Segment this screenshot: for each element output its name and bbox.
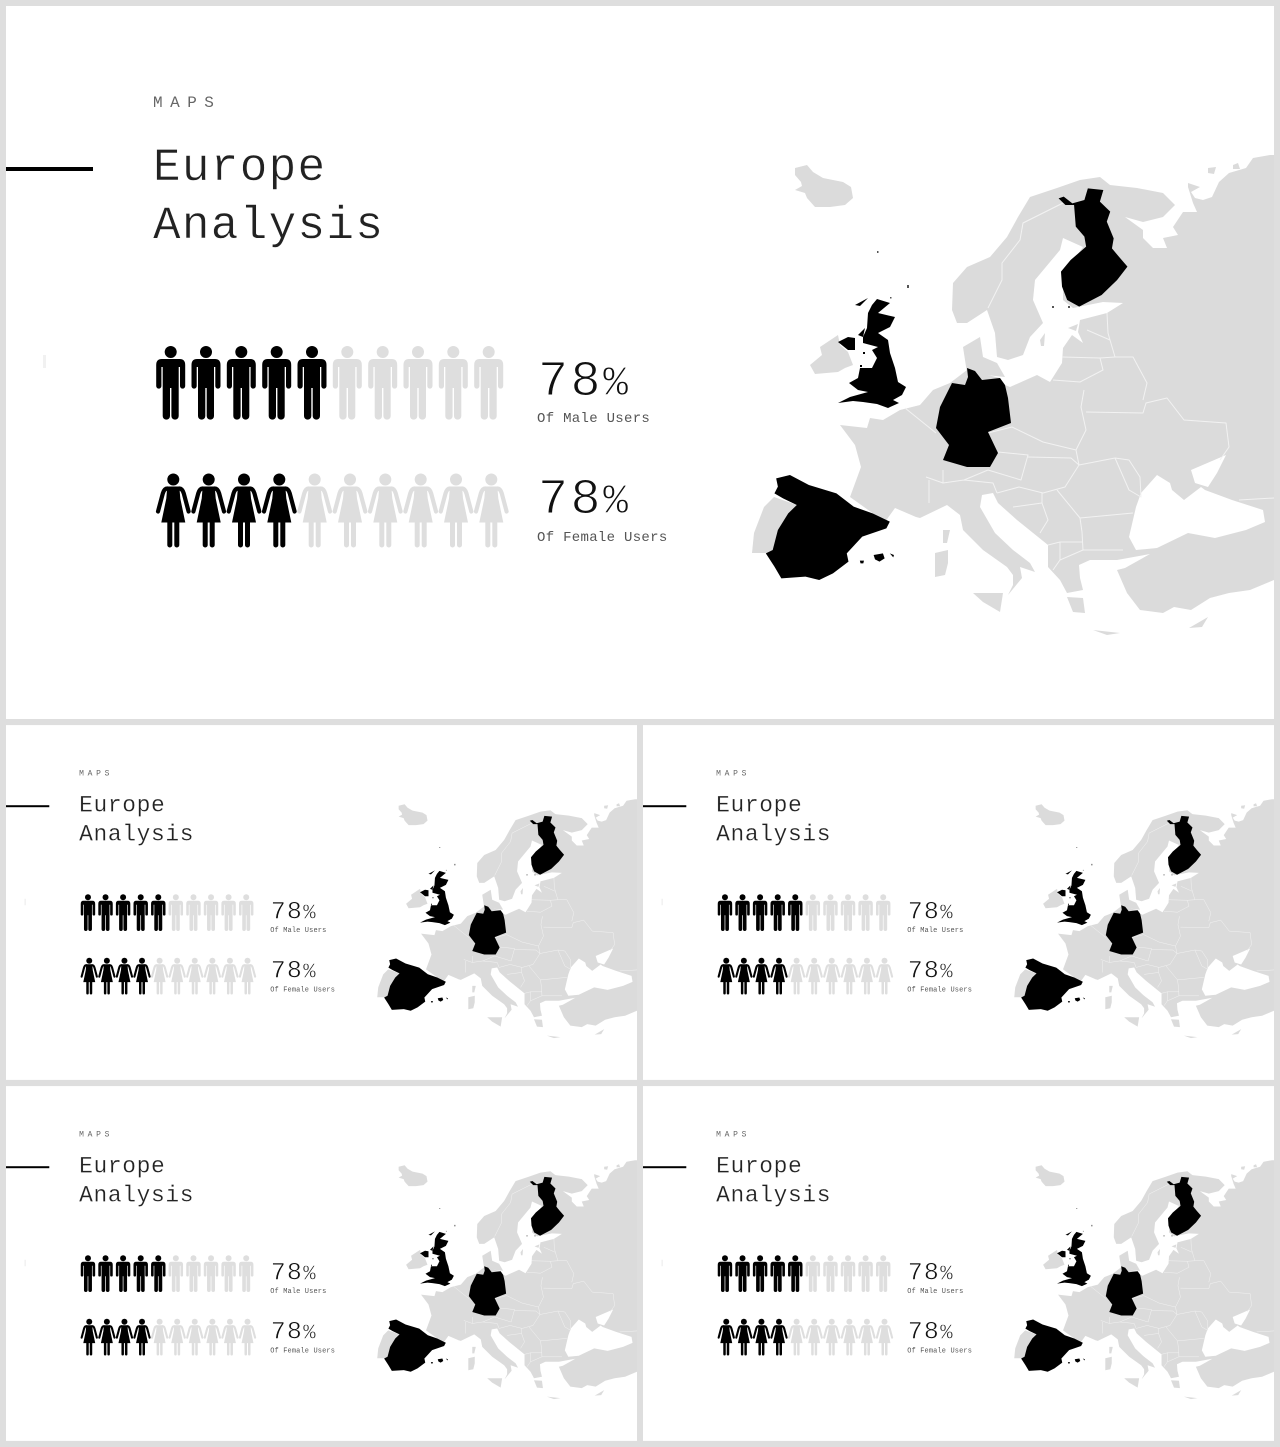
accent line — [6, 167, 93, 171]
pictogram: male users — [718, 1255, 890, 1292]
stat: female users — [270, 1318, 335, 1355]
pictogram: female users — [82, 1319, 255, 1356]
panel: small slide top left — [6, 725, 637, 1080]
map of Europe — [377, 799, 647, 1038]
stat: male users: Of Male Users — [270, 1288, 326, 1296]
pictogram: male users — [156, 346, 503, 420]
title — [153, 142, 384, 252]
stat: female users: 78% — [538, 472, 631, 529]
title: Analysis — [153, 200, 384, 252]
stat: male users — [270, 1260, 326, 1296]
section label: MAPS — [153, 94, 221, 112]
map of Europe — [377, 1160, 647, 1399]
panel: large slide — [6, 6, 1274, 719]
section label: MAPS — [79, 1130, 113, 1139]
title: Europe — [79, 1154, 165, 1180]
pictogram: male users — [81, 894, 253, 931]
stat: female users: Of Female Users — [907, 1347, 972, 1355]
map of Europe — [1014, 1160, 1280, 1399]
stat: female users — [907, 957, 972, 994]
stat: female users — [270, 957, 335, 994]
stat: male users: 78% — [538, 354, 631, 411]
pictogram: female users — [82, 958, 255, 995]
stat: female users — [537, 472, 668, 546]
stat: male users: Of Male Users — [907, 1288, 963, 1296]
title: Europe — [79, 793, 165, 819]
accent line — [6, 1166, 49, 1168]
panel: small slide bottom left — [6, 1086, 637, 1441]
stat: male users — [907, 1260, 963, 1296]
stat: female users: 78% — [271, 957, 317, 985]
stat: male users: 78% — [908, 1260, 954, 1288]
panel: small slide top right — [643, 725, 1274, 1080]
pictogram: male users — [718, 894, 890, 931]
accent line — [643, 805, 686, 807]
pictogram: male users — [81, 1255, 253, 1292]
panel: small slide bottom right — [643, 1086, 1274, 1441]
stat: female users: Of Female Users — [537, 530, 668, 546]
title — [716, 793, 831, 848]
stat: female users — [907, 1318, 972, 1355]
stat: male users: 78% — [271, 1260, 317, 1288]
title — [79, 1154, 194, 1209]
stat: female users: Of Female Users — [270, 986, 335, 994]
accent line — [643, 1166, 686, 1168]
accent line — [6, 805, 49, 807]
stat: male users: 78% — [908, 899, 954, 927]
section label: MAPS — [79, 769, 113, 778]
title: Europe — [153, 142, 326, 194]
stat: female users: Of Female Users — [270, 1347, 335, 1355]
stat: female users: Of Female Users — [907, 986, 972, 994]
stat: male users — [907, 899, 963, 935]
title: Analysis — [79, 822, 194, 848]
pictogram: female users — [719, 1319, 892, 1356]
stat: female users: 78% — [271, 1318, 317, 1346]
title: Analysis — [716, 1183, 831, 1209]
stat: male users: Of Male Users — [907, 927, 963, 935]
pictogram: female users — [158, 474, 507, 548]
stat: female users: 78% — [908, 957, 954, 985]
title: Analysis — [716, 822, 831, 848]
title: Analysis — [79, 1183, 194, 1209]
title — [79, 793, 194, 848]
stat: male users: 78% — [271, 899, 317, 927]
title — [716, 1154, 831, 1209]
map of Europe — [752, 155, 1280, 635]
section label: MAPS — [716, 769, 750, 778]
stat: male users — [270, 899, 326, 935]
stat: male users: Of Male Users — [270, 927, 326, 935]
pictogram: female users — [719, 958, 892, 995]
stat: female users: 78% — [908, 1318, 954, 1346]
title: Europe — [716, 1154, 802, 1180]
map of Europe — [1014, 799, 1280, 1038]
stat: male users — [537, 354, 650, 427]
stat: male users: Of Male Users — [537, 411, 650, 427]
section label: MAPS — [716, 1130, 750, 1139]
title: Europe — [716, 793, 802, 819]
